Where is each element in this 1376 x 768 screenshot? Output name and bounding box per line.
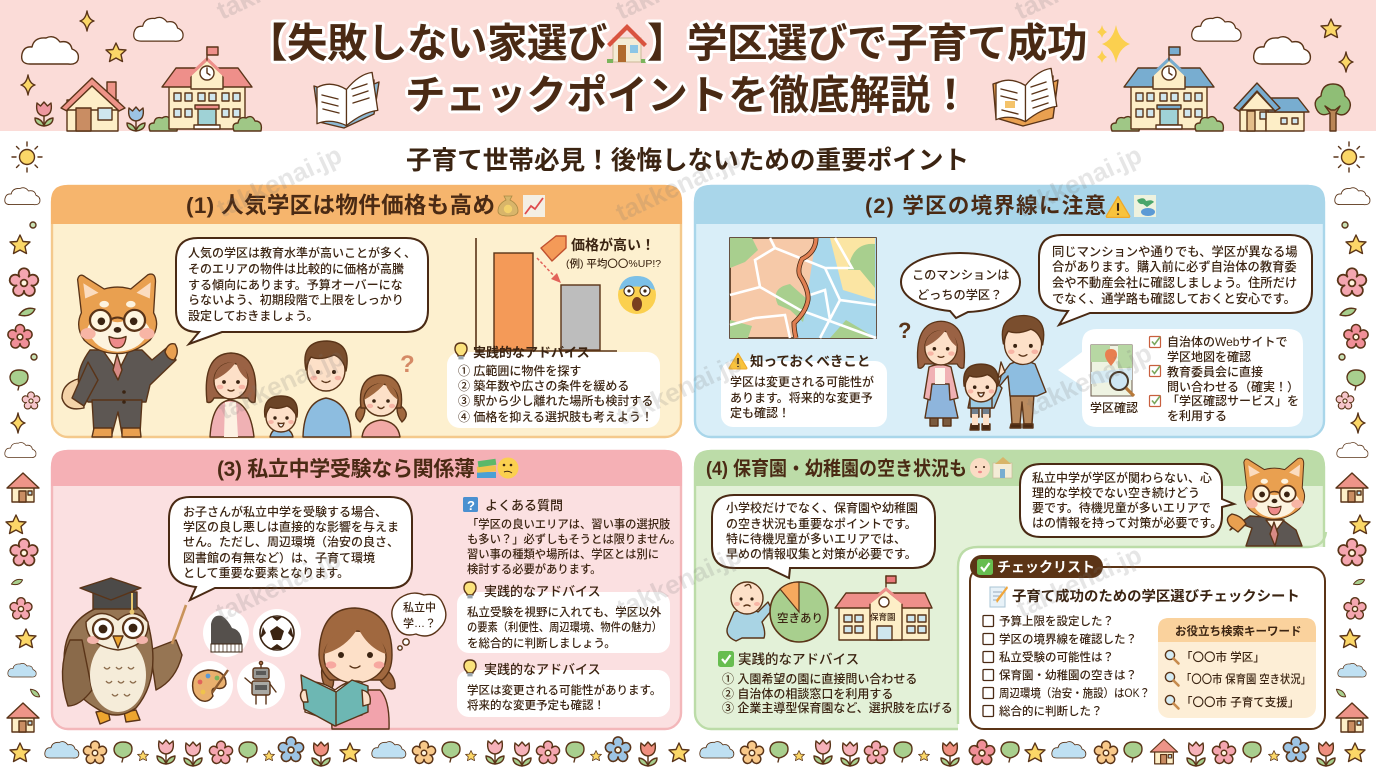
icon: sparkles <box>1097 25 1130 63</box>
checklist lines: 問い合わせる（確実！） <box>1167 379 1299 394</box>
checklist lines: 教育委員会に直接 <box>1167 364 1263 379</box>
panel 3: private junior high <box>51 450 682 729</box>
keyword box: 「〇〇市 子育て支援」 <box>1181 695 1299 709</box>
right border decorations <box>1334 142 1370 732</box>
thought bubble: 学…？ <box>403 616 436 630</box>
note box: things to know <box>721 353 887 427</box>
icon: chart rising <box>523 195 545 217</box>
thought bubble <box>392 593 446 650</box>
speech bubble 3: として重要な要素となります。 <box>183 565 349 580</box>
speech bubble: which district: どっちの学区？ <box>917 287 1002 302</box>
icon: memo <box>990 586 1008 607</box>
advice list 4: ③ 企業主導型保育園など、選択肢を広げる <box>722 700 953 715</box>
checklist lines: 「学区確認サービス」を <box>1167 393 1299 408</box>
verification box <box>1058 329 1303 427</box>
panel 2: school district boundary <box>694 185 1325 437</box>
title <box>247 20 1130 118</box>
speech bubble: which district <box>901 253 1020 318</box>
speech bubble: which district: このマンションは <box>912 268 1010 282</box>
checklist items: 総合的に判断した？ <box>999 704 1102 718</box>
speech bubble 3: せん。ただし、周辺環境（治安の良さ、 <box>183 534 399 549</box>
icon: books <box>477 459 496 478</box>
pie chart: vacancies <box>770 582 828 642</box>
speech bubble: top right: 理的な学校でない空き続けどう <box>1032 485 1200 500</box>
subtitle: 子育て世帯必見！後悔しないための重要ポイント <box>406 146 969 175</box>
girl reading a book <box>300 608 395 729</box>
family illustration 1 <box>206 341 415 437</box>
watermarks: takkenai.jp <box>611 143 745 227</box>
header band <box>0 0 1376 131</box>
family illustration 1: ? <box>400 351 415 378</box>
watermarks <box>211 0 1156 627</box>
icon: thinking face <box>498 458 518 478</box>
advice box 3a: の要素（利便性、周辺環境、物件の魅力） <box>467 620 662 634</box>
speech bubble 1 <box>176 238 428 344</box>
nursery building: 保育園 <box>870 612 896 622</box>
speech bubble 3: お子さんが私立中学を受験する場合、 <box>183 504 387 519</box>
speech bubble 1: らないよう、初期段階で上限をしっかり <box>188 292 404 307</box>
speech bubble: top right: はの情報を持って対策が必要です。 <box>1032 515 1222 530</box>
advice box 3a: 実践的なアドバイス <box>484 584 601 599</box>
watermarks: takkenai.jp <box>1022 337 1156 421</box>
advice box 3b: 将来的な変更予定も確認！ <box>467 698 605 712</box>
keyword box: 「〇〇市 学区」 <box>1181 650 1265 664</box>
keyword box <box>1158 618 1316 718</box>
watermarks: takkenai.jp <box>1012 139 1146 223</box>
owl teacher <box>62 578 186 724</box>
icon: money bag <box>498 196 518 216</box>
price tag callout: 価格が高い！ <box>571 237 655 253</box>
advice list 4: 実践的なアドバイス <box>738 652 859 667</box>
left border decorations <box>5 142 42 732</box>
checklist lines: 自治体のWebサイトで <box>1167 334 1287 349</box>
note box: things to know: 学区は変更される可能性が <box>730 374 874 389</box>
checklist card <box>970 555 1325 729</box>
keyword box: 「〇〇市 保育園 空き状況」 <box>1181 672 1311 686</box>
header illustration: left scene <box>21 11 261 131</box>
speech bubble 1: 設定しておきましょう。 <box>188 309 319 323</box>
panel 1: popular school district <box>51 185 682 437</box>
speech bubble 1: 人気の学区は教育水準が高いことが多く、 <box>188 245 416 260</box>
thought bubble: 私立中 <box>403 600 436 614</box>
bar chart: price comparison: 周辺エリア <box>550 361 615 376</box>
title: 】学区選びで子育て成功 <box>647 20 1087 66</box>
advice box 3b: 実践的なアドバイス <box>484 662 601 677</box>
speech bubble: top right: 要です。待機児童が多いエリアで <box>1032 500 1211 515</box>
advice box 1: ① 広範囲に物件を探す <box>458 363 581 378</box>
checklist lines: 学区地図を確認 <box>1167 349 1251 364</box>
checklist items: 私立受験の可能性は？ <box>999 650 1114 664</box>
checklist items: 予算上限を設定した？ <box>999 614 1114 628</box>
watermarks: takkenai.jp <box>612 347 746 431</box>
checklist items <box>983 614 1150 718</box>
speech bubble 4: 特に待機児童が多いエリアでは、 <box>726 531 906 546</box>
panel 4: nursery availability <box>694 450 1328 736</box>
advice box 1: ② 築年数や広さの条件を緩める <box>458 378 629 393</box>
icon: palette <box>187 661 233 709</box>
FAQ text: 「学区の良いエリアは、習い事の選択肢 <box>467 517 671 531</box>
verification box: 学区確認 <box>1090 400 1138 415</box>
watermarks: takkenai.jp <box>211 543 345 627</box>
speech bubble 4: 小学校だけでなく、保育園や幼稚園 <box>726 500 918 515</box>
speech bubble: top right: 私立中学が学区が関わらない、心 <box>1032 470 1212 485</box>
heading 2: (2) 学区の境界線に注意 <box>865 194 1106 218</box>
speech bubble: top right <box>1020 464 1234 537</box>
checklist tag <box>970 555 1103 578</box>
price tag callout <box>541 236 661 270</box>
advice box 3a: を総合的に判断しましょう。 <box>467 636 616 650</box>
icon: map emoji <box>1134 195 1156 217</box>
note box: things to know: あります。将来的な変更予 <box>730 390 873 405</box>
icon: warning sign <box>1106 197 1130 217</box>
speech bubble 3: 学区の良し悪しは直接的な影響を与えま <box>183 519 399 534</box>
heading 3: (3) 私立中学受験なら関係薄 <box>217 458 475 481</box>
advice box 1: 実践的なアドバイス <box>473 345 590 360</box>
white cut-out for checklist <box>958 547 1328 736</box>
advice box 3a: 私立受験を視野に入れても、学区以外 <box>467 605 662 619</box>
advice box 3a <box>457 582 670 653</box>
checklist items: 保育園・幼稚園の空きは？ <box>999 668 1137 682</box>
FAQ text <box>463 497 681 576</box>
speech bubble 1: する傾向にあります。予算オーバーにな <box>188 277 403 292</box>
FAQ text: よくある質問 <box>485 498 563 513</box>
bar chart: price comparison: 人気学区 <box>489 361 541 376</box>
advice box 1: ④ 価格を抑える選択肢も考えよう！ <box>458 409 653 424</box>
checklist lines: を利用する <box>1167 409 1227 423</box>
header illustration: right scene <box>1111 17 1353 131</box>
checklist tag: チェックリスト <box>997 559 1095 575</box>
advice list 4: ② 自治体の相談窓口を利用する <box>722 686 893 701</box>
advice list 4 <box>718 651 953 715</box>
checklist card: 子育て成功のための学区選びチェックシート <box>1012 587 1300 605</box>
bar chart: price comparison <box>476 238 617 376</box>
price tag callout: (例) 平均〇〇%UP!? <box>566 257 661 270</box>
speech bubble 1: そのエリアの物件は比較的に価格が高騰 <box>188 261 404 276</box>
title: チェックポイントを徹底解説！ <box>405 72 971 118</box>
watermarks: takkenai.jp <box>612 539 746 623</box>
map illustration <box>730 238 876 338</box>
speech bubble 3: 図書館の有無など）は、子育て環境 <box>183 550 375 565</box>
speech bubble 2: でなく、通学路も確認しておくと安心です。 <box>1052 291 1296 306</box>
advice list 4: ① 入園希望の園に直接問い合わせる <box>722 671 917 686</box>
family illustration 2 <box>898 316 1046 430</box>
icon: soccer ball <box>253 609 301 657</box>
icon: shocked face <box>618 276 656 314</box>
shiba mascot bottom right <box>1227 458 1305 546</box>
checklist items: 学区の境界線を確認した？ <box>999 632 1137 646</box>
speech bubble 3 <box>169 497 412 600</box>
bottom border decorations <box>10 737 1365 766</box>
FAQ text: 習い事の種類や場所は、学区とは別に <box>467 547 659 561</box>
nursery building <box>835 576 932 640</box>
heading 1: (1) 人気学区は物件価格も高め <box>186 193 495 218</box>
watermarks: takkenai.jp <box>214 341 348 425</box>
keyword box: お役立ち検索キーワード <box>1175 624 1302 638</box>
speech bubble 2: 同じマンションや通りでも、学区が異なる場 <box>1052 244 1298 259</box>
note box: things to know: 知っておくべきこと <box>750 354 870 369</box>
FAQ text: も多い？」必ずしもそうとは限りません。 <box>467 532 681 546</box>
advice box 1: ③ 駅から少し離れた場所も検討する <box>458 393 653 408</box>
title: 【失敗しない家選び <box>247 20 607 66</box>
icon: open book left <box>314 72 379 128</box>
icon: map and magnifier <box>1091 345 1134 396</box>
FAQ text: ? <box>467 498 475 513</box>
checklist lines <box>1150 334 1299 423</box>
advice box 3b <box>457 660 670 717</box>
pie chart: vacancies: 空きあり <box>777 611 823 625</box>
icon: open book right <box>993 68 1058 126</box>
icon: school emoji <box>993 457 1012 478</box>
speech bubble 4 <box>712 495 935 578</box>
baby illustration <box>727 582 772 641</box>
icon: piano <box>203 609 249 657</box>
icon: house emoji <box>607 24 647 63</box>
speech bubble 4: 早めの情報収集と対策が必要です。 <box>726 546 917 561</box>
family illustration 2: ? <box>898 318 911 343</box>
icon: robot <box>237 661 285 709</box>
watermarks: takkenai.jp <box>212 139 346 223</box>
activity icons <box>187 609 301 709</box>
speech bubble 2: 会や不動産会社に確認しましょう。住所だけ <box>1052 275 1297 290</box>
speech bubble 4: の空き状況も重要なポイントです。 <box>726 516 917 531</box>
advice box 1 <box>447 343 660 428</box>
checklist items: 周辺環境（治安・施設）はOK？ <box>999 686 1150 700</box>
note box: things to know: 定も確認！ <box>730 405 790 420</box>
FAQ text: 検討する必要があります。 <box>467 562 601 576</box>
speech bubble 2: 合があります。購入前に必ず自治体の教育委 <box>1052 259 1297 274</box>
watermarks: takkenai.jp <box>1012 539 1146 623</box>
heading 4: (4) 保育園・幼稚園の空き状況も <box>706 458 967 480</box>
icon: baby face <box>970 458 990 478</box>
advice box 3b: 学区は変更される可能性があります。 <box>467 683 661 697</box>
shiba mascot presenter <box>62 274 177 437</box>
speech bubble 2 <box>1039 235 1312 325</box>
